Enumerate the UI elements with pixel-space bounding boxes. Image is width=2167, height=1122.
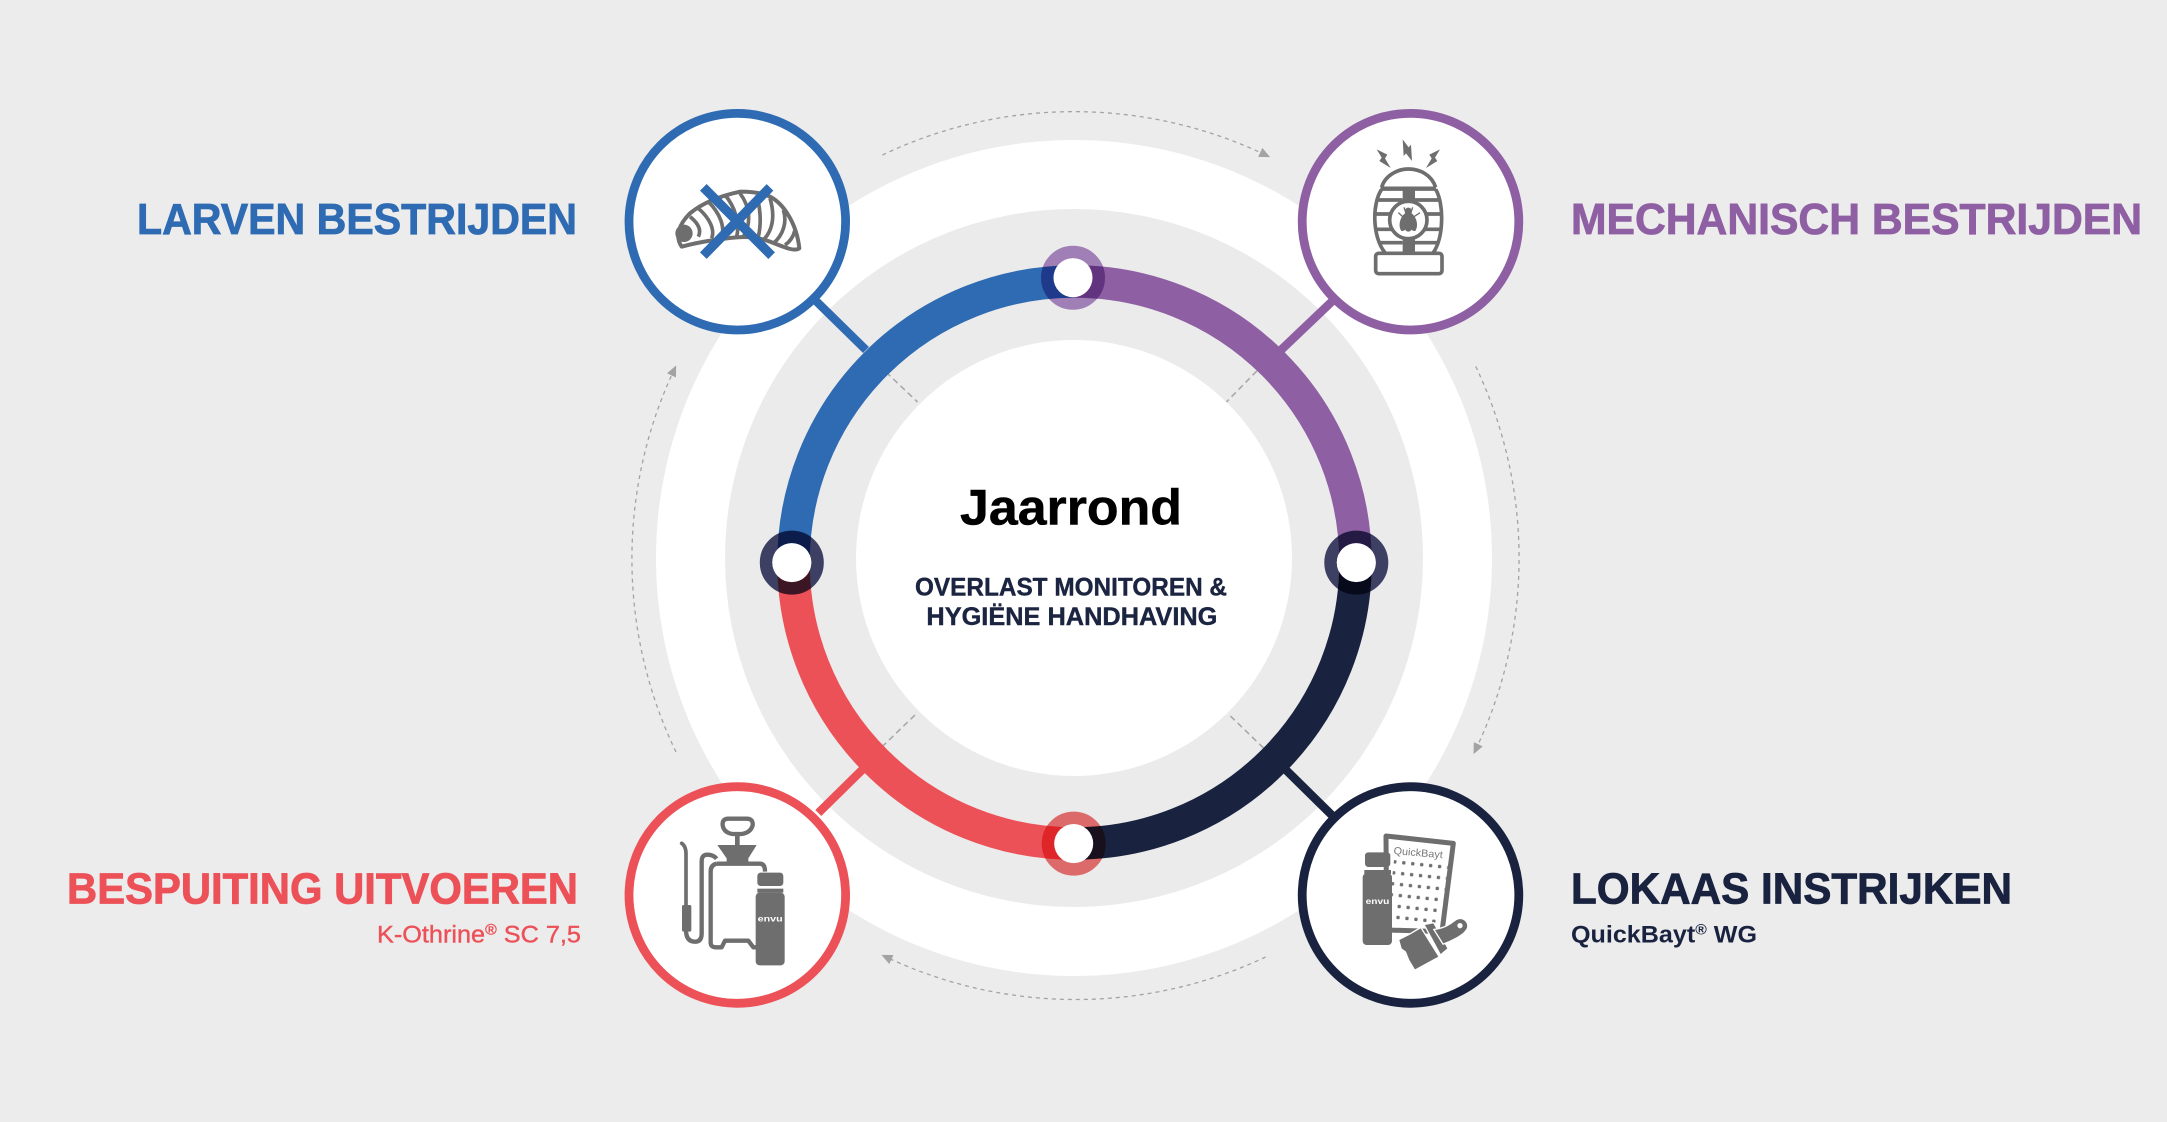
- circle: spraying: [629, 787, 846, 1003]
- icon: QuickBayt card, bottle and brush: envu: [1366, 896, 1389, 906]
- label: quickbayt: ®: [1695, 922, 1707, 939]
- centre title: Jaarrond: [960, 480, 1182, 536]
- icon: pressure sprayer and bottle: envu: [758, 914, 783, 924]
- label: bespuiting uitvoeren: BESPUITING UITVOEREN: [67, 866, 578, 914]
- icon: QuickBayt card, bottle and brush: QuickBayt: [1393, 846, 1443, 861]
- icon: fly trap: [1375, 139, 1442, 274]
- label: larven bestrijden: LARVEN BESTRIJDEN: [137, 196, 577, 244]
- circle: larvae: [629, 113, 846, 330]
- outer dashed cycle arrows: [632, 112, 1519, 1000]
- centre subtitle: [915, 574, 1227, 631]
- centre subtitle: HYGIËNE HANDHAVING: [926, 603, 1217, 631]
- main ring: [794, 282, 1356, 844]
- circle: mechanical: [1302, 113, 1519, 330]
- label: k-othrine: K-Othrine: [377, 922, 480, 949]
- inner dashed connectors: [882, 371, 1264, 748]
- label: quickbayt: WG: [1707, 922, 1757, 949]
- icon: crossed-out larva: [675, 187, 799, 256]
- connector lines: [815, 300, 1332, 815]
- label: mechanisch bestrijden: MECHANISCH BESTRIJDEN: [1571, 196, 2142, 244]
- centre subtitle: OVERLAST MONITOREN &: [915, 574, 1227, 602]
- icon: QuickBayt card, bottle and brush: [1363, 836, 1467, 969]
- ring nodes: [766, 252, 1382, 869]
- icon: pressure sprayer and bottle: [682, 819, 785, 965]
- label: lokaas instrijken: LOKAAS INSTRIJKEN: [1571, 866, 2012, 914]
- circle: bait: [1302, 787, 1519, 1003]
- background concentric circles: [656, 140, 1492, 976]
- label: k-othrine: ®: [485, 922, 497, 939]
- label: quickbayt: QuickBayt: [1571, 922, 1690, 949]
- label: k-othrine: SC 7,5: [497, 922, 581, 949]
